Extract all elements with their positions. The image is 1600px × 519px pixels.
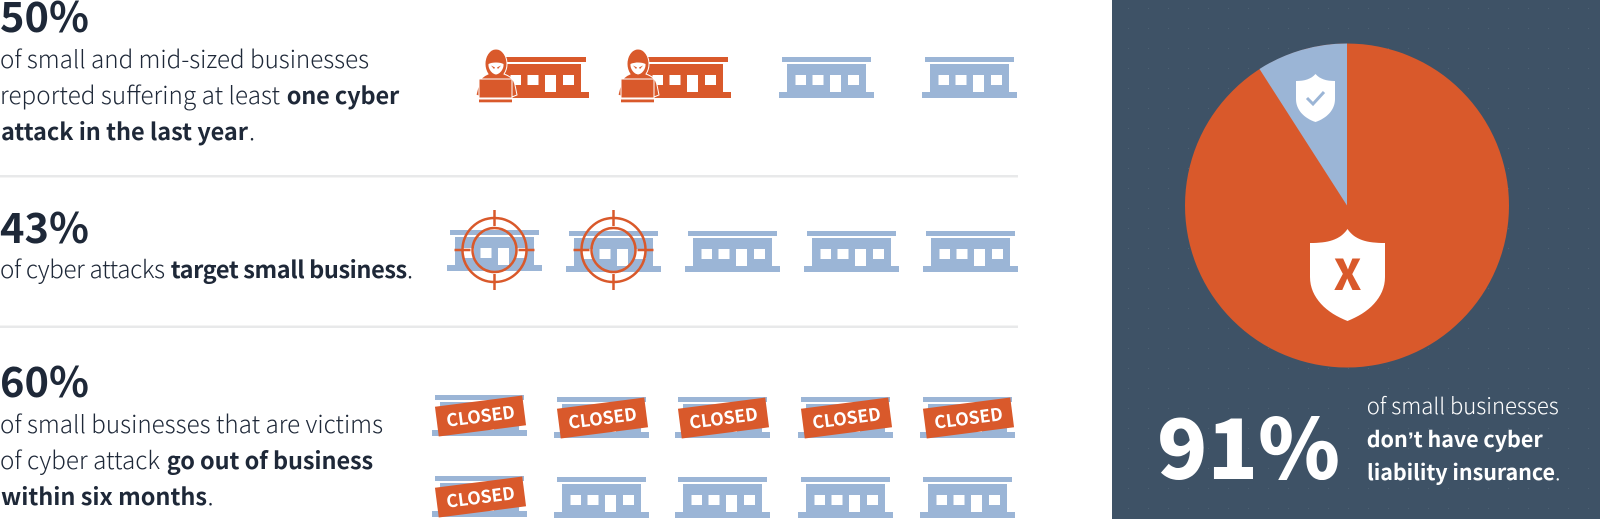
panel: cyber liability insurance: [1112, 0, 1600, 519]
icon: safe building: [779, 57, 874, 98]
icon: targeted building 2: [566, 210, 661, 290]
text: 50% description: attack in the last year: [1, 113, 249, 147]
icon: hacked building 1: [476, 49, 589, 102]
text: 50% description: .: [249, 112, 255, 147]
text: 91% description: liability insurance: [1367, 456, 1555, 487]
stat block: 43%: [0, 195, 413, 285]
icon: closed building 3: CLOSED: [688, 401, 759, 435]
text: 43% description: of cyber attacks: [0, 250, 165, 285]
icon: closed building 4: CLOSED: [811, 401, 882, 435]
icon: closed building 5: CLOSED: [933, 401, 1004, 435]
text: 60% description: go out of business: [167, 442, 373, 476]
icon: shield with X: X: [1334, 242, 1362, 303]
text: 50% description: of small and mid-sized businesses: [0, 40, 369, 75]
icon: closed building 6: CLOSED: [445, 480, 516, 514]
text: 60% description: [0, 405, 383, 512]
text: 60% description: of small businesses that are victims: [0, 405, 383, 440]
icon: closed building 4: [798, 397, 893, 438]
text: 91% description: don’t have cyber: [1367, 423, 1543, 454]
icon: building: [804, 231, 899, 272]
big number: 91%: 91%: [1157, 383, 1340, 503]
text: 50% description: one cyber: [287, 77, 400, 111]
text: 60% description: within six months: [1, 478, 207, 512]
icon: safe building: [922, 57, 1017, 98]
icon: hacked building 2: [618, 49, 731, 102]
text: 43% description: [0, 250, 413, 285]
text: 91% description: .: [1555, 455, 1561, 487]
icon: closed building 2: CLOSED: [567, 401, 638, 435]
text: 43% description: target small business: [171, 251, 407, 285]
icon: building: [923, 231, 1018, 272]
text: 60% description: .: [208, 477, 214, 512]
heading: 60%: 60%: [0, 349, 89, 409]
icon: building: [675, 477, 770, 518]
icon: closed building 6: [432, 476, 527, 517]
text: 50% description: reported suffering at least: [0, 76, 280, 111]
icon: closed building 1: [432, 395, 527, 436]
text: 43% description: .: [407, 250, 413, 285]
icon: shield with X: [1310, 229, 1385, 321]
pictogram: row 3, six of ten buildings closed: [432, 395, 1015, 518]
text: 91% description: [1367, 389, 1561, 487]
stat block: 60%: [0, 349, 383, 512]
icon: building: [554, 477, 649, 518]
icon: hacker 1: [476, 49, 517, 102]
icon: building: [798, 477, 893, 518]
icon: closed building 1: CLOSED: [445, 399, 516, 433]
icon: shield with check: [1296, 74, 1335, 122]
icon: building: [920, 477, 1015, 518]
icon: hacker 2: [618, 49, 659, 102]
icon: closed building 3: [675, 397, 770, 438]
icon: building: [685, 231, 780, 272]
pie chart: 91% uninsured: [1185, 43, 1509, 367]
heading: 43%: 43%: [0, 195, 89, 255]
stat block: 50%: [0, 0, 400, 147]
text: 50% description: [0, 40, 400, 147]
pictogram: row 1, two of four buildings hacked: [476, 49, 1017, 102]
text: 91% description: of small businesses: [1367, 389, 1559, 421]
icon: targeted building 1: [447, 210, 542, 290]
icon: closed building 5: [920, 397, 1015, 438]
text: 60% description: of cyber attack: [0, 441, 160, 476]
pictogram: row 2, two of five buildings targeted: [447, 210, 1018, 290]
icon: closed building 2: [554, 397, 649, 438]
